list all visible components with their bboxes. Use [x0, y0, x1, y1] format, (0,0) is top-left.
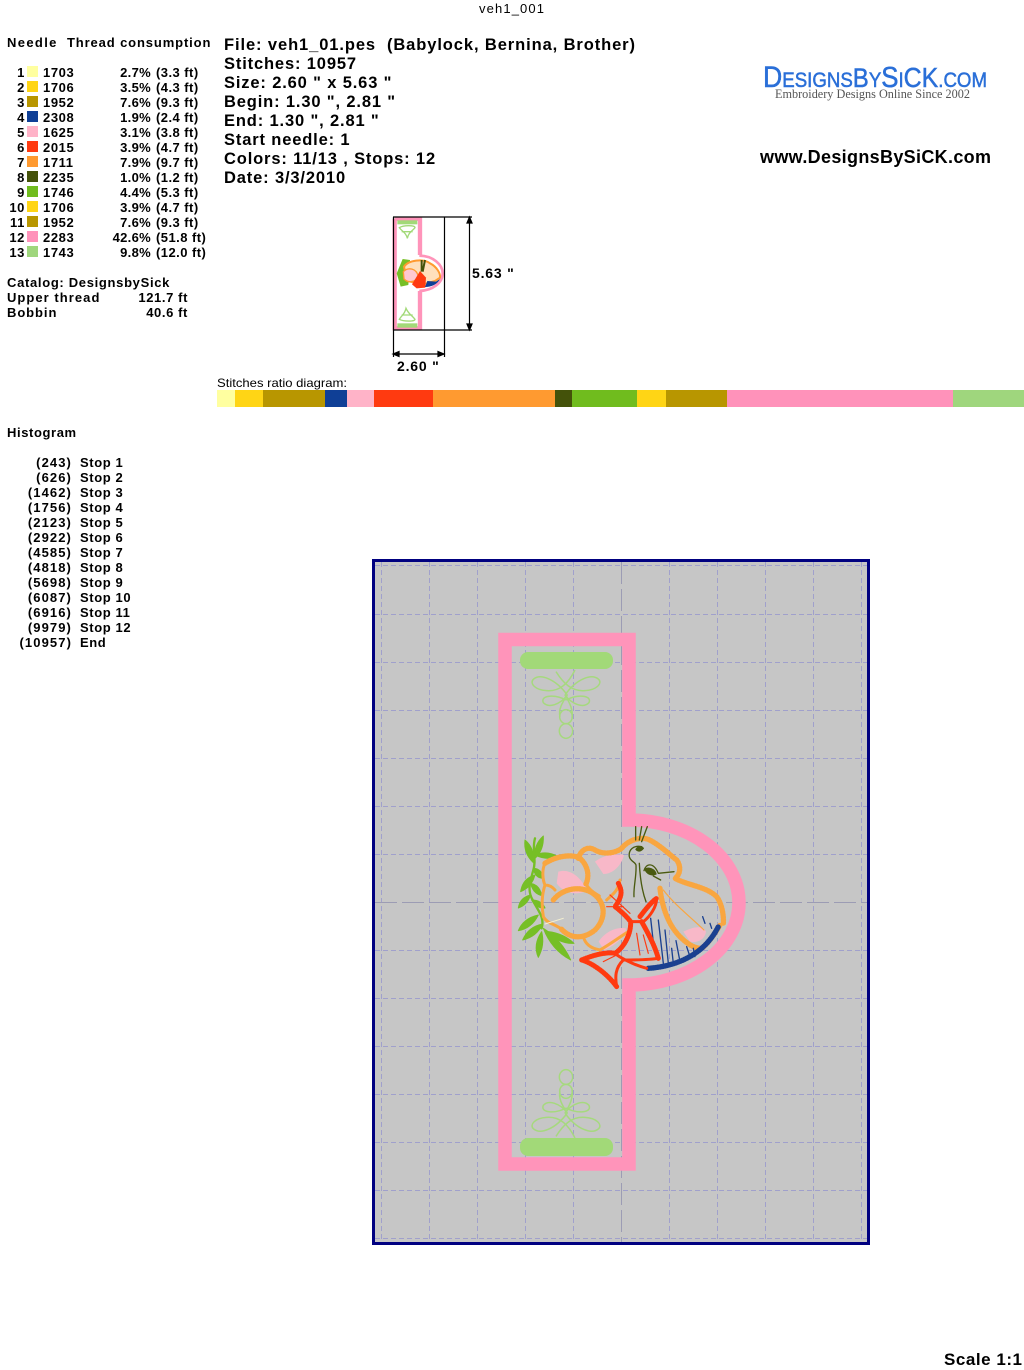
thread rows: (1.2 ft): [156, 170, 199, 185]
panel: file information: File: veh1_01.pes (Babylock, Bernina, Brother): [224, 36, 635, 54]
panel: file information: Begin: 1.30 ", 2.81 ": [224, 93, 396, 111]
thread rows: [9, 65, 206, 260]
thread rows: 2308: [43, 110, 74, 125]
histogram rows: Stop 1: [80, 455, 123, 470]
thread rows: 1711: [43, 155, 74, 170]
thread rows: 3: [17, 95, 25, 110]
thread rows: 42.6%: [113, 230, 151, 245]
histogram rows: (4818): [28, 560, 72, 575]
thread rows: (4.3 ft): [156, 80, 199, 95]
thread rows: (4.7 ft): [156, 140, 199, 155]
height label: 5.63 ": [472, 265, 515, 281]
thread rows: 7: [17, 155, 25, 170]
thread rows: 1746: [43, 185, 74, 200]
histogram rows: (626): [36, 470, 72, 485]
thread rows: 3.5%: [120, 80, 151, 95]
thread rows: 2283: [43, 230, 74, 245]
thread rows: (3.8 ft): [156, 125, 199, 140]
thread rows: 10: [9, 200, 25, 215]
fern leaves: [518, 836, 574, 960]
scale label: Scale 1:1: [944, 1350, 1022, 1369]
histogram rows: Stop 7: [80, 545, 123, 560]
logo: DesignsBySick: Embroidery Designs Online Since 2002: [775, 87, 970, 101]
histogram rows: (1462): [28, 485, 72, 500]
red bow: [582, 883, 658, 987]
orange outlines: [542, 838, 723, 950]
thread rows: (2.4 ft): [156, 110, 199, 125]
panel: file information: Colors: 11/13 , Stops: 12: [224, 150, 436, 168]
thread rows: (9.7 ft): [156, 155, 199, 170]
thread rows: (3.3 ft): [156, 65, 199, 80]
thread rows: 1743: [43, 245, 74, 260]
bunny and basket embroidery: [518, 827, 723, 987]
thread rows: 2: [17, 80, 25, 95]
thread rows: 2235: [43, 170, 74, 185]
pink outline border: [505, 640, 739, 1164]
thread rows: 1.0%: [120, 170, 151, 185]
catalog and totals: Upper thread: [7, 290, 100, 305]
histogram rows: Stop 10: [80, 590, 131, 605]
table heading: Thread consumption: [67, 35, 211, 50]
histogram heading: Histogram: [7, 425, 77, 440]
catalog and totals: Bobbin: [7, 305, 57, 320]
thread rows: (12.0 ft): [156, 245, 206, 260]
catalog and totals: Catalog: DesignsbySick: [7, 275, 170, 290]
histogram rows: (6087): [28, 590, 72, 605]
thread rows: (9.3 ft): [156, 215, 199, 230]
histogram rows: (243): [36, 455, 72, 470]
panel: file information: Start needle: 1: [224, 131, 350, 149]
histogram rows: Stop 6: [80, 530, 123, 545]
thread rows: 1.9%: [120, 110, 151, 125]
thread rows: (9.3 ft): [156, 95, 199, 110]
histogram rows: (10957): [19, 635, 72, 650]
thread rows: 9.8%: [120, 245, 151, 260]
thread rows: 4: [17, 110, 25, 125]
thread rows: 1952: [43, 95, 74, 110]
stitches ratio label: Stitches ratio diagram:: [217, 376, 347, 390]
thread rows: 13: [9, 245, 25, 260]
panel: embroidery design preview: [374, 560, 868, 1244]
thread rows: 1706: [43, 80, 74, 95]
top scroll ornament: [532, 670, 600, 738]
thread rows: 9: [17, 185, 25, 200]
thread rows: 1706: [43, 200, 74, 215]
thread rows: 1703: [43, 65, 74, 80]
thread rows: 3.1%: [120, 125, 151, 140]
catalog and totals: [7, 275, 188, 320]
histogram rows: Stop 5: [80, 515, 123, 530]
bottom scroll ornament: [532, 1070, 600, 1138]
thread rows: (51.8 ft): [156, 230, 206, 245]
panel: file information: [224, 36, 635, 187]
thread rows: 2015: [43, 140, 74, 155]
histogram rows: End: [80, 635, 106, 650]
panel: needle and thread table: [7, 35, 211, 320]
hoop frame: [374, 560, 868, 1244]
thread rows: 1625: [43, 125, 74, 140]
thread rows: 1952: [43, 215, 74, 230]
histogram rows: Stop 9: [80, 575, 123, 590]
thread rows: 5: [17, 125, 25, 140]
thread rows: 7.6%: [120, 95, 151, 110]
panel: file information: End: 1.30 ", 2.81 ": [224, 112, 380, 130]
thread rows: 12: [9, 230, 25, 245]
panel: file information: Date: 3/3/2010: [224, 169, 346, 187]
catalog and totals: 121.7 ft: [138, 290, 188, 305]
bottom satin bar: [520, 1138, 613, 1156]
histogram rows: Stop 12: [80, 620, 131, 635]
histogram rows: (2123): [28, 515, 72, 530]
histogram rows: (6916): [28, 605, 72, 620]
logo: DesignsBySick: DESIGNSBYSICK.COM: [763, 61, 987, 94]
histogram rows: (9979): [28, 620, 72, 635]
thread rows: 3.9%: [120, 200, 151, 215]
thread rows: 1: [17, 65, 25, 80]
histogram rows: (5698): [28, 575, 72, 590]
panel: histogram: [7, 425, 131, 650]
thread rows: 7.9%: [120, 155, 151, 170]
panel: file information: Size: 2.60 " x 5.63 ": [224, 74, 392, 92]
white stitch: [545, 918, 563, 924]
table heading: Needle: [7, 35, 57, 50]
stitches ratio bar: [217, 390, 1024, 407]
thread rows: 6: [17, 140, 25, 155]
page title: veh1_001: [479, 1, 544, 16]
olive face details: [629, 827, 674, 902]
histogram rows: Stop 2: [80, 470, 123, 485]
thumbnail with dimensions: [393, 217, 515, 374]
website address: www.DesignsBySiCK.com: [759, 147, 991, 167]
thread rows: (5.3 ft): [156, 185, 199, 200]
thread rows: 3.9%: [120, 140, 151, 155]
histogram rows: Stop 11: [80, 605, 130, 620]
histogram rows: Stop 3: [80, 485, 123, 500]
panel: file information: Stitches: 10957: [224, 55, 357, 73]
thread rows: 7.6%: [120, 215, 151, 230]
histogram rows: Stop 4: [80, 500, 123, 515]
thread rows: (4.7 ft): [156, 200, 199, 215]
top satin bar: [520, 652, 613, 669]
dimension lines: [393, 217, 472, 357]
histogram rows: (4585): [28, 545, 72, 560]
thumbnail design: [395, 219, 443, 328]
pink fill stitches: [557, 854, 706, 950]
thread rows: 11: [10, 215, 25, 230]
histogram rows: Stop 8: [80, 560, 123, 575]
histogram rows: (2922): [28, 530, 72, 545]
thread rows: 2.7%: [120, 65, 151, 80]
histogram rows: [19, 455, 131, 650]
catalog and totals: 40.6 ft: [146, 305, 188, 320]
width label: 2.60 ": [397, 358, 440, 374]
histogram rows: (1756): [28, 500, 72, 515]
thread rows: 4.4%: [120, 185, 151, 200]
thread rows: 8: [17, 170, 25, 185]
basket ribs and rim: [648, 917, 718, 968]
